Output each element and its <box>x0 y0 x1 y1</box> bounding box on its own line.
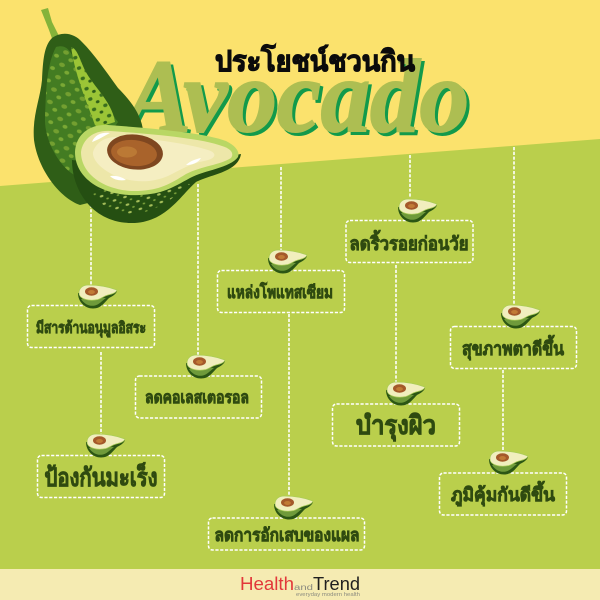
icon: mini avocado <box>386 382 425 406</box>
icon: mini avocado <box>274 496 313 520</box>
benefit: cancer prevention <box>38 434 164 498</box>
title: Avocado script wordmark: Avocado <box>122 42 472 157</box>
title: Avocado script wordmark: Avocado <box>119 39 469 154</box>
illustration: large avocado <box>34 8 241 223</box>
green diagonal panel <box>0 139 600 570</box>
icon: mini avocado <box>86 434 125 458</box>
seed <box>105 132 165 172</box>
title: Thai heading: ประโยชน์ชวนกิน <box>215 43 415 78</box>
benefit: immunity: ภูมิคุ้มกันดีขึ้น <box>451 481 555 507</box>
benefit: potassium source: แหล่งโพแทสเซียม <box>227 282 333 302</box>
flesh glints <box>92 133 110 142</box>
cut half skin <box>72 154 241 223</box>
benefit: potassium source <box>218 250 344 312</box>
benefit: lower cholesterol: ลดคอเลสเตอรอล <box>145 388 249 407</box>
footer logo: Health and Trend <box>240 574 360 598</box>
icon: mini avocado <box>398 199 437 222</box>
benefit: cancer prevention: ป้องกันมะเร็ง <box>44 462 158 492</box>
benefit: eye health: สุขภาพตาดีขึ้น <box>462 335 564 361</box>
highlight on skin <box>71 47 115 128</box>
icon: mini avocado <box>186 355 225 378</box>
footer logo: Health and Trend: everyday modern health <box>296 592 360 598</box>
footer logo: Health and Trend: and <box>294 583 313 592</box>
cut half flesh <box>75 125 238 195</box>
icon: mini avocado <box>489 451 528 474</box>
benefit: reduce wrinkles <box>346 199 473 262</box>
dashed connector lines <box>91 147 514 497</box>
benefit: immunity <box>440 451 566 515</box>
benefit: reduce wrinkles: ลดริ้วรอยก่อนวัย <box>350 230 468 254</box>
benefit: wound inflammation: ลดการอักเสบของแผล <box>214 525 360 545</box>
benefit: wound inflammation <box>208 496 364 550</box>
footer logo: Health and Trend: Trend <box>313 574 360 594</box>
footer band <box>0 569 600 600</box>
benefit: antioxidants: มีสารต้านอนุมูลอิสระ <box>36 319 146 339</box>
benefit: lower cholesterol <box>136 355 262 418</box>
benefit: eye health <box>450 305 576 368</box>
icon: mini avocado <box>501 305 540 328</box>
footer logo: Health and Trend: Health <box>240 574 294 594</box>
stem <box>41 8 60 44</box>
benefit: antioxidants <box>28 285 154 348</box>
icon: mini avocado <box>268 250 307 274</box>
benefit: skin care <box>332 382 460 446</box>
benefit: skin care: บำรุงผิว <box>356 410 436 442</box>
whole avocado body <box>34 34 143 205</box>
icon: mini avocado <box>78 285 117 308</box>
